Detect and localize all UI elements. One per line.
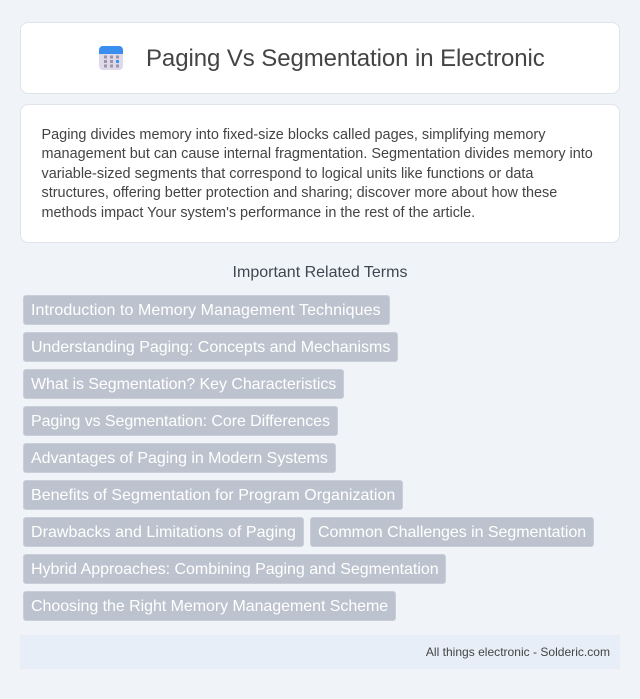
tag: Hybrid Approaches: Combining Paging and Segmentation (31, 561, 439, 578)
tag: Advantages of Paging in Modern Systems (31, 450, 328, 467)
tag: Understanding Paging: Concepts and Mechanisms (31, 339, 390, 356)
title: Paging Vs Segmentation in Electronic (146, 45, 545, 72)
tag: Introduction to Memory Management Techniques (31, 302, 381, 319)
tag (23, 443, 336, 473)
tag: What is Segmentation? Key Characteristics (31, 376, 336, 393)
tag: Common Challenges in Segmentation (318, 524, 586, 541)
tag: Choosing the Right Memory Management Scheme (31, 598, 388, 615)
tag (310, 517, 594, 547)
paragraph text: management but can cause internal fragmentation. Segmentation divides memory into (42, 146, 593, 162)
tag (23, 406, 338, 436)
paragraph text: variable-sized segments that correspond to logical units like functions or data (42, 166, 533, 182)
paragraph text: Paging divides memory into fixed-size blocks called pages, simplifying memory (42, 127, 545, 143)
footer bar (20, 635, 620, 669)
paragraph text (42, 127, 593, 221)
icon: calendar grid (99, 46, 123, 70)
tag (23, 295, 390, 325)
tag: Benefits of Segmentation for Program Organization (31, 487, 395, 504)
footer credit: All things electronic - Solderic.com (426, 645, 610, 659)
tag list (23, 295, 594, 621)
tag (23, 369, 344, 399)
panel: intro paragraph (20, 104, 620, 243)
section heading: Important Related Terms (233, 264, 407, 281)
tag (23, 332, 398, 362)
paragraph text: methods impact Your system's performance in the rest of the article. (42, 205, 475, 221)
tag (23, 591, 396, 621)
tag: Drawbacks and Limitations of Paging (31, 524, 296, 541)
header card (20, 22, 620, 94)
tag (23, 480, 403, 510)
tag (23, 554, 446, 584)
tag: Paging vs Segmentation: Core Differences (31, 413, 330, 430)
tag (23, 517, 304, 547)
paragraph text: structures, offering better protection and sharing; discover more about how these (42, 185, 557, 201)
